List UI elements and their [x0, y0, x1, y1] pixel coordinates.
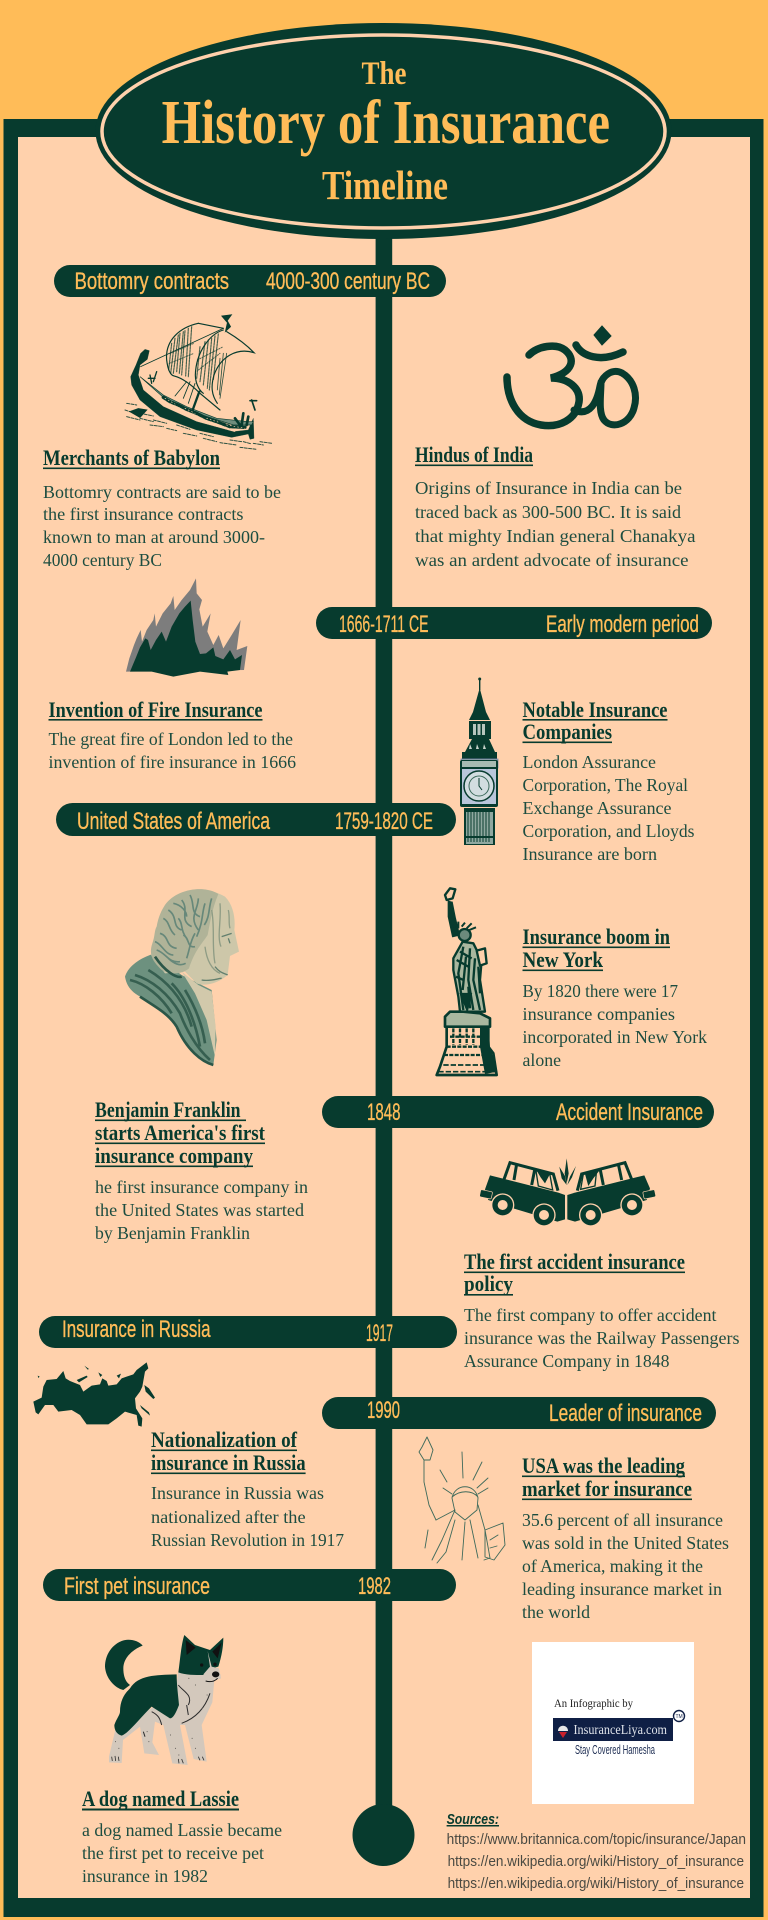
text block: first accident insurance policy: The first accident insurance: [464, 1249, 685, 1274]
text block: first accident insurance policy: Assurance Company in 1848: [464, 1351, 670, 1371]
text block: Nationalization of insurance in Russia: insurance in Russia: [151, 1450, 306, 1475]
text block: Nationalization of insurance in Russia: Nationalization of: [151, 1427, 298, 1452]
logo card: InsuranceLiya: TM: [676, 1714, 683, 1720]
text block: Hindus of India: [415, 442, 696, 570]
text block: first accident insurance policy: insurance was the Railway Passengers: [464, 1328, 740, 1348]
icon: flames: [126, 578, 247, 677]
icon: viking ship: [125, 315, 272, 449]
era bar: First pet insurance: First pet insurance: [64, 1573, 210, 1600]
logo card: InsuranceLiya: Stay Covered Hamesha: [575, 1742, 655, 1757]
text block: Insurance boom in New York: Insurance boom in: [522, 924, 670, 949]
text block: A dog named Lassie: the first pet to receive pet: [82, 1843, 264, 1863]
text block: Nationalization of insurance in Russia: Insurance in Russia was: [151, 1483, 324, 1503]
text block: Merchants of Babylon: [43, 445, 281, 570]
era bar: United States of America: 1759-1820 CE: [335, 808, 433, 835]
text block: Benjamin Franklin: starts America's first: [95, 1120, 266, 1145]
text block: Insurance boom in New York: incorporated in New York: [522, 1027, 707, 1047]
text block: Invention of Fire Insurance: invention of fire insurance in 1666: [48, 752, 296, 772]
text block: Insurance boom in New York: [522, 924, 707, 1070]
era bar: Early modern period: 1666-1711 CE: [339, 611, 428, 638]
text block: Benjamin Franklin: [95, 1097, 308, 1243]
text block: Invention of Fire Insurance: The great fire of London led to the: [48, 729, 293, 749]
text block: USA leading market: market for insurance: [522, 1476, 692, 1501]
text block: Nationalization of insurance in Russia: nationalized after the: [151, 1507, 306, 1527]
icon: dog: [105, 1635, 223, 1765]
era bar: Bottomry contracts: Bottomry contracts: [74, 268, 229, 295]
text block: Notable Insurance Companies: London Assurance: [522, 752, 656, 772]
title badge: The: [362, 56, 406, 92]
text block: Insurance boom in New York: alone: [522, 1050, 561, 1070]
sources: https://en.wikipedia.org/wiki/History_of_insurance: [448, 1853, 744, 1870]
era bar: First pet insurance: 1982: [358, 1573, 391, 1600]
text block: A dog named Lassie: a dog named Lassie became: [82, 1820, 282, 1840]
icon: Big Ben: [460, 678, 498, 845]
text block: Hindus of India: Origins of Insurance in India can be: [415, 478, 682, 498]
timeline spine: [352, 230, 414, 1866]
text block: Notable Insurance Companies: Exchange Assurance: [522, 798, 672, 818]
era bar: Insurance in Russia: Insurance in Russia: [62, 1316, 211, 1343]
logo card: InsuranceLiya: InsuranceLiya.com: [574, 1723, 667, 1738]
text block: Merchants of Babylon: the first insurance contracts: [43, 504, 244, 524]
text block: first accident insurance policy: The first company to offer accident: [464, 1305, 716, 1325]
text block: Hindus of India: Hindus of India: [415, 442, 533, 467]
text block: Merchants of Babylon: Bottomry contracts are said to be: [43, 482, 281, 502]
text block: USA leading market: [522, 1453, 729, 1622]
text block: Invention of Fire Insurance: [48, 697, 296, 772]
text block: Merchants of Babylon: known to man at around 3000-: [43, 527, 265, 547]
icon: Benjamin Franklin bust: [125, 889, 239, 1065]
era bar: Early modern period: Early modern period: [546, 611, 699, 638]
text block: A dog named Lassie: A dog named Lassie: [82, 1786, 239, 1811]
text block: Nationalization of insurance in Russia: Russian Revolution in 1917: [151, 1530, 344, 1550]
text block: Notable Insurance Companies: [522, 697, 694, 864]
title badge: History of Insurance: [162, 89, 610, 157]
text block: Notable Insurance Companies: Companies: [522, 719, 612, 744]
era bar: Insurance in Russia: 1917: [366, 1320, 393, 1347]
era bar: First pet insurance: [43, 1569, 456, 1601]
text block: USA leading market: USA was the leading: [522, 1453, 685, 1478]
text block: first accident insurance policy: [464, 1249, 740, 1371]
icon: Statue of Liberty sketch: [419, 1437, 505, 1563]
text block: Notable Insurance Companies: Insurance are born: [522, 844, 657, 864]
title badge: [96, 23, 672, 239]
text block: Benjamin Franklin: by Benjamin Franklin: [95, 1223, 250, 1243]
era bar: Early modern period: [316, 607, 712, 639]
text block: Insurance boom in New York: By 1820 there were 17: [522, 981, 678, 1001]
text block: USA leading market: was sold in the United States: [522, 1533, 729, 1553]
sources: https://www.britannica.com/topic/insurance/Japan: [447, 1831, 746, 1848]
era bar: Insurance in Russia: [39, 1316, 457, 1348]
icon: om symbol: [507, 326, 636, 426]
logo card: InsuranceLiya: [532, 1642, 694, 1804]
icon: Statue of Liberty: [437, 888, 497, 1075]
text block: Notable Insurance Companies: Corporation, and Lloyds: [522, 821, 694, 841]
era bar: Accident Insurance: Accident Insurance: [556, 1099, 703, 1126]
sources: [447, 1811, 746, 1892]
text block: USA leading market: the world: [522, 1602, 590, 1622]
era bar: Leader of insurance: Leader of insurance: [549, 1400, 702, 1427]
title badge: Timeline: [322, 162, 448, 208]
text block: Notable Insurance Companies: Corporation, The Royal: [522, 775, 688, 795]
era bar: United States of America: [56, 803, 456, 836]
text block: Benjamin Franklin: he first insurance company in: [95, 1177, 308, 1197]
text block: Nationalization of insurance in Russia: [151, 1427, 344, 1550]
text block: Merchants of Babylon: 4000 century BC: [43, 550, 162, 570]
text block: A dog named Lassie: insurance in 1982: [82, 1866, 208, 1886]
text block: USA leading market: 35.6 percent of all insurance: [522, 1510, 723, 1530]
era bar: United States of America: United States of America: [77, 808, 270, 835]
era bar: Bottomry contracts: [54, 265, 446, 297]
text block: Hindus of India: that mighty Indian general Chanakya: [415, 526, 696, 546]
sources: Sources:: [447, 1811, 499, 1828]
text block: Hindus of India: was an ardent advocate of insurance: [415, 550, 688, 570]
text block: Insurance boom in New York: New York: [522, 947, 604, 972]
text block: Hindus of India: traced back as 300-500 BC. It is said: [415, 502, 681, 522]
text block: Notable Insurance Companies: Notable Insurance: [522, 697, 668, 722]
text block: first accident insurance policy: policy: [464, 1271, 513, 1296]
icon: map of Russia: [33, 1362, 155, 1427]
text block: A dog named Lassie: [82, 1786, 282, 1886]
text block: Benjamin Franklin: Benjamin Franklin: [95, 1097, 240, 1122]
logo card: InsuranceLiya: An Infographic by: [554, 1696, 633, 1710]
sources: https://en.wikipedia.org/wiki/History_of_insurance: [448, 1875, 744, 1892]
text block: USA leading market: leading insurance market in: [522, 1579, 722, 1599]
era bar: Accident Insurance: 1848: [367, 1099, 400, 1126]
era bar: Leader of insurance: [322, 1397, 716, 1429]
text block: Benjamin Franklin: insurance company: [95, 1143, 253, 1168]
era bar: Leader of insurance: 1990: [367, 1397, 400, 1424]
text block: Invention of Fire Insurance: Invention of Fire Insurance: [48, 697, 263, 722]
icon: crashed cars: [479, 1158, 656, 1227]
era bar: Bottomry contracts: 4000-300 century BC: [266, 268, 430, 295]
era bar: Accident Insurance: [322, 1096, 714, 1128]
text block: USA leading market: of America, making it the: [522, 1556, 703, 1576]
text block: Benjamin Franklin: the United States was started: [95, 1200, 304, 1220]
text block: Insurance boom in New York: insurance companies: [522, 1004, 675, 1024]
text block: Merchants of Babylon: Merchants of Babylon: [43, 445, 220, 470]
